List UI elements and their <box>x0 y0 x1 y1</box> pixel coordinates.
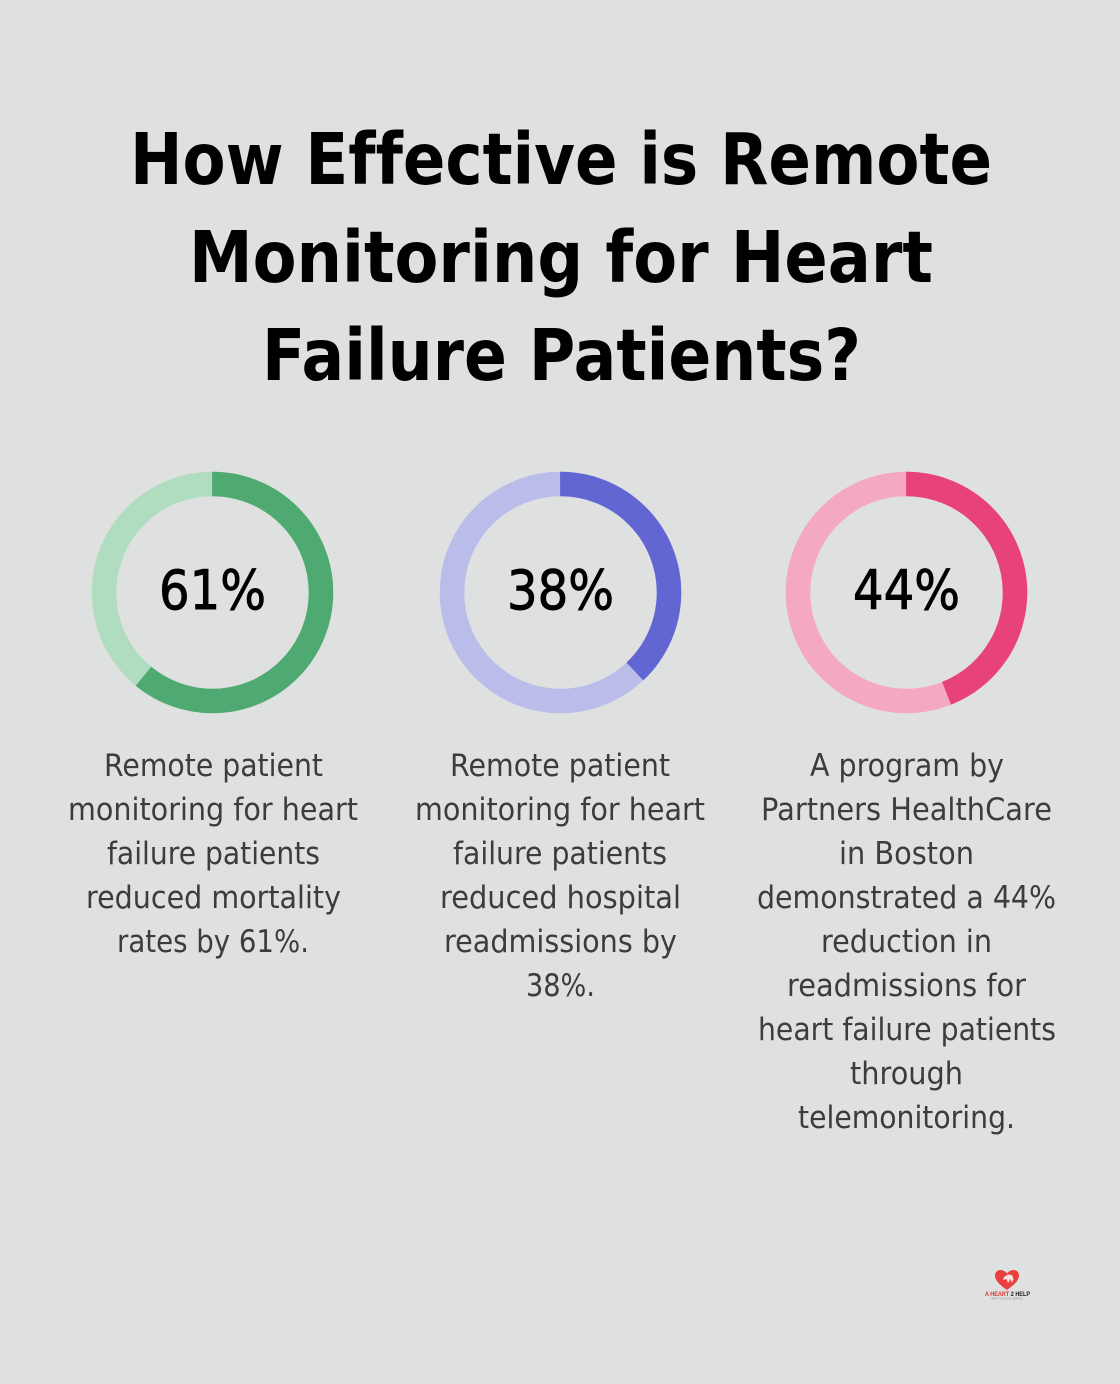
text block: readmissions: 38%. <box>526 968 595 1004</box>
text block: readmissions <box>415 748 705 1004</box>
logo: A Heart 2 Help: A HEART 2 HELP <box>985 1292 1030 1298</box>
text block: Partners HealthCare: Partners HealthCare <box>761 792 1052 828</box>
text block: Partners HealthCare: telemonitoring. <box>798 1100 1015 1136</box>
logo: A Heart 2 Help: HEART AND SOUL SERVICE <box>991 1298 1023 1300</box>
title: How Effective is Remote <box>130 118 992 201</box>
panel: 44% telemonitoring program <box>757 484 1056 1136</box>
donut chart: 44% <box>798 484 1015 701</box>
text block: Partners HealthCare <box>757 748 1056 1136</box>
text block: mortality: reduced mortality <box>86 880 341 916</box>
text block: Partners HealthCare: readmissions for <box>787 968 1026 1004</box>
text block: Partners HealthCare: demonstrated a 44% <box>757 880 1056 916</box>
text block: mortality: Remote patient <box>104 748 323 784</box>
text block: readmissions: monitoring for heart <box>415 792 705 828</box>
text block: Partners HealthCare: heart failure patients <box>758 1012 1056 1048</box>
panel: 61% mortality reduction <box>68 484 358 960</box>
text block: mortality: monitoring for heart <box>68 792 358 828</box>
text block: mortality: failure patients <box>107 836 320 872</box>
text block: Partners HealthCare: through <box>850 1056 963 1092</box>
text block: Partners HealthCare: in Boston <box>839 836 974 872</box>
donut chart: 61% <box>104 484 321 701</box>
icon: heart <box>995 1270 1019 1290</box>
text block: readmissions: readmissions by <box>444 924 677 960</box>
text block: mortality: rates by 61%. <box>117 924 309 960</box>
donut chart: 44%: 44% <box>853 559 960 622</box>
text block: Partners HealthCare: A program by <box>810 748 1004 784</box>
donut chart: 38% <box>452 484 669 701</box>
text block: readmissions: failure patients <box>453 836 667 872</box>
title: Monitoring for Heart <box>189 216 933 299</box>
text block: mortality <box>68 748 358 960</box>
text block: readmissions: reduced hospital <box>440 880 681 916</box>
text block: Partners HealthCare: reduction in <box>821 924 992 960</box>
title: Failure Patients? <box>262 314 861 397</box>
donut chart: 61%: 61% <box>159 559 266 622</box>
panel: 38% readmission reduction <box>415 484 705 1004</box>
text block: readmissions: Remote patient <box>450 748 670 784</box>
logo: A Heart 2 Help <box>985 1270 1030 1300</box>
title <box>130 118 992 397</box>
donut chart: 38%: 38% <box>507 559 614 622</box>
